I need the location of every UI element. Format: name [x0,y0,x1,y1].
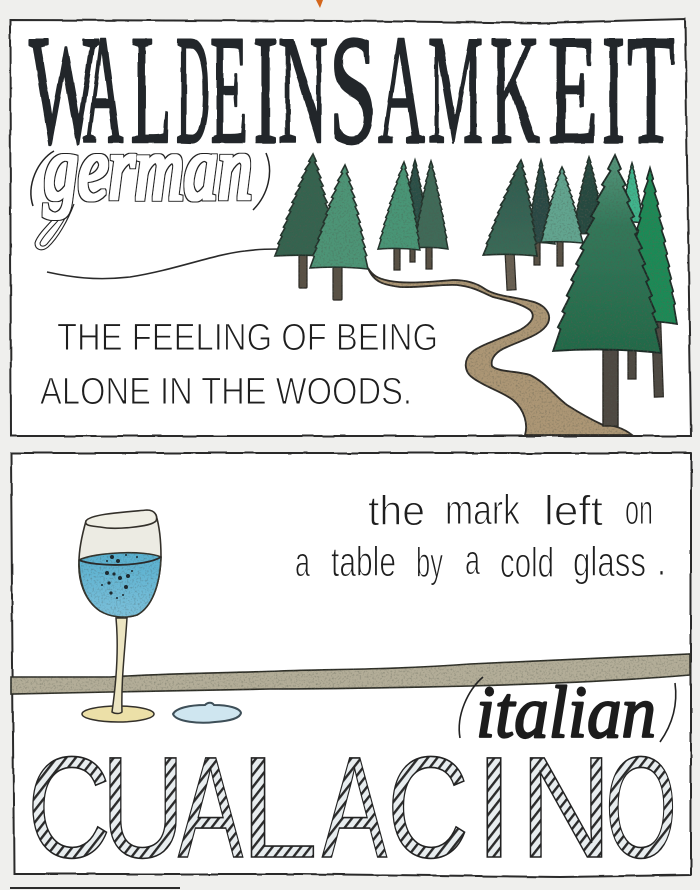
icon: water ring puddle [173,703,241,723]
title: waldeinsamkeit: M [428,3,483,176]
trunk [534,240,540,265]
definition text: cold [500,539,554,586]
language label: german [31,117,270,250]
tree: light [310,165,374,269]
tree: mid green [483,160,548,256]
title: waldeinsamkeit: E [210,3,248,176]
title: cualacino: C [387,727,469,888]
definition text: a [295,538,310,585]
trunk [394,247,400,270]
title: cualacino: A [322,727,387,888]
back trunk [628,345,636,379]
title: cualacino: U [101,727,185,888]
tree: small bright [621,163,643,223]
tree: big foreground [553,155,669,353]
tree cluster: right [483,155,677,426]
title: waldeinsamkeit: N [278,3,328,176]
definition text: table [331,538,396,585]
definition text: by [416,539,443,586]
glass base [82,706,154,722]
trunk [652,320,663,397]
definition text: the [368,487,425,534]
glass bowl [79,515,161,617]
next panel top edge [10,887,180,889]
title: waldeinsamkeit: E [548,3,598,176]
trunk [299,255,307,288]
title: cualacino: A [178,727,243,888]
definition text: left [544,487,603,534]
trunk [426,246,432,269]
hill line [47,249,282,279]
panel: waldeinsamkeit [10,3,691,436]
tree cluster: middle [378,160,448,270]
icon: orange tip at top edge [316,0,323,8]
bubbles [101,554,138,599]
title: waldeinsamkeit: S [329,3,377,176]
title: waldeinsamkeit: D [176,3,210,176]
icon: wine glass [79,510,161,722]
definition text: on [625,486,653,533]
tree: pale [541,167,583,243]
title: cualacino: N [520,727,612,888]
big trunk [603,350,618,426]
language label: german: german [44,117,252,219]
definition text: . [657,537,666,584]
trunk [505,252,516,290]
title: cualacino: C [27,727,111,888]
water surface line [79,557,161,565]
definition text: a [465,536,480,583]
title: waldeinsamkeit: I [602,3,625,176]
definition text: mark [445,486,521,533]
water [79,553,161,617]
panel frame [10,19,691,436]
tree: back dark [400,160,430,245]
trunk [410,244,415,262]
glass rim [86,510,157,528]
tree cluster: left [275,154,374,300]
title: cualacino: L [240,727,318,888]
title: waldeinsamkeit: W [29,3,99,176]
tree: light [378,162,425,250]
definition text: glass [573,538,646,585]
tree: back dark [527,160,555,244]
title: waldeinsamkeit: K [490,3,540,176]
trunk [333,265,342,300]
tree: bright green [623,168,677,324]
definition text: THE FEELING OF BEING [57,317,438,359]
tree: far back dark [573,157,605,235]
tree: dark [275,154,344,257]
title: waldeinsamkeit: A [83,3,124,176]
panel frame [11,453,691,877]
title: waldeinsamkeit: A [378,3,425,176]
title: waldeinsamkeit: I [253,3,278,176]
definition text: ALONE IN THE WOODS. [40,371,412,413]
trunk [557,240,563,266]
title: cualacino: I [474,727,514,888]
title: waldeinsamkeit: L [131,3,172,176]
language label: italian: italian [476,672,656,754]
panel: cualacino [11,453,691,888]
tree: mid green [414,161,448,249]
glass stem [112,618,127,714]
winding path [368,268,632,435]
table band [11,654,690,694]
